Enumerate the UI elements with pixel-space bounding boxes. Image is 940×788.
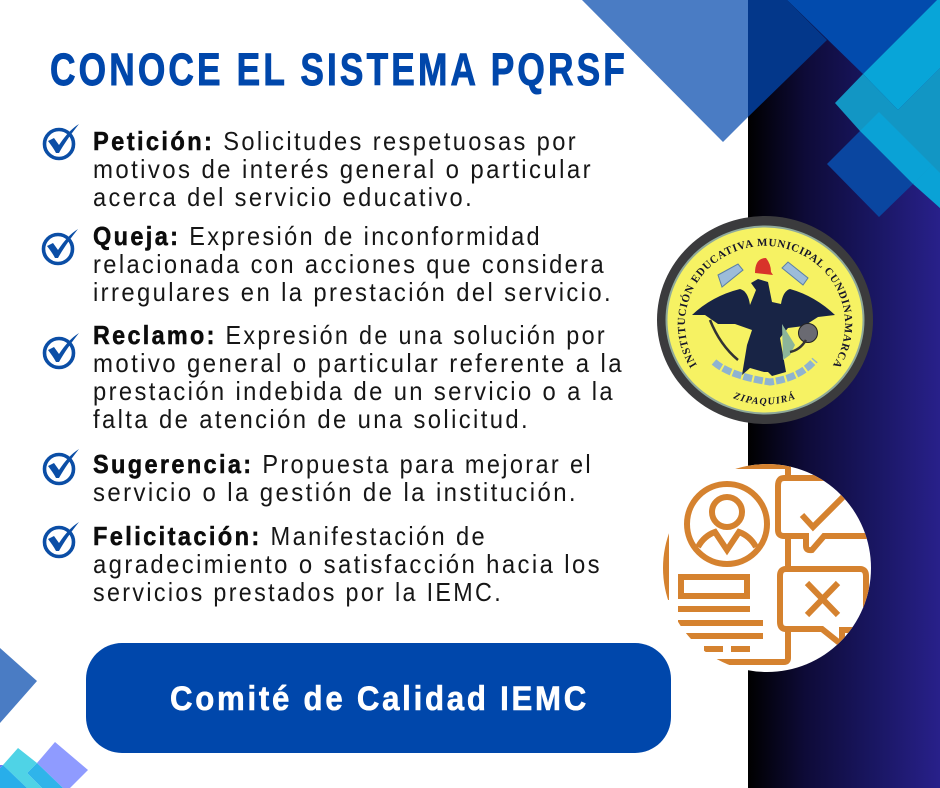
- item: Petición: motivos de interés general o particular: [93, 154, 593, 184]
- item: Reclamo: falta de atención de una solicitud.: [93, 404, 530, 434]
- item: Reclamo: motivo general o particular referente a la: [93, 348, 624, 378]
- item: Queja: relacionada con acciones que considera: [93, 249, 606, 279]
- school crest seal: [657, 216, 873, 424]
- item: Reclamo: [44, 320, 624, 434]
- right dark gradient panel: [748, 0, 940, 788]
- item: Felicitación: servicios prestados por la IEMC.: [93, 577, 503, 607]
- item: Sugerencia: Sugerencia: Propuesta para mejorar el: [93, 449, 593, 479]
- item: Petición: Petición: Solicitudes respetuosas por: [93, 126, 578, 156]
- item: Sugerencia: [44, 449, 593, 507]
- school crest seal: ZIPAQUIRÁ: [733, 390, 795, 406]
- item: Petición: [44, 124, 593, 212]
- item: Felicitación: [44, 521, 602, 607]
- item: Sugerencia: servicio o la gestión de la institución.: [93, 477, 578, 507]
- school crest seal: INSTITUCIÓN EDUCATIVA MUNICIPAL CUNDINAMARCA: [678, 238, 852, 368]
- item: Petición: acerca del servicio educativo.: [93, 182, 474, 212]
- item: Queja: Queja: Expresión de inconformidad: [93, 221, 542, 251]
- bottom-left decorative shapes: [0, 648, 88, 788]
- button: Comité de Calidad IEMC: Comité de Calidad IEMC: [170, 680, 589, 718]
- item: Reclamo: Reclamo: Expresión de una solución por: [93, 320, 607, 350]
- feedback icon circle: [663, 464, 871, 672]
- top decorative triangles and diamonds: [582, 0, 940, 217]
- button: Comité de Calidad IEMC: [86, 643, 671, 753]
- item: Felicitación: Felicitación: Manifestación de: [93, 521, 487, 551]
- item: Reclamo: prestación indebida de un servicio o a la: [93, 376, 615, 406]
- item: Queja: irregulares en la prestación del servicio.: [93, 277, 613, 307]
- item: Queja: [44, 221, 613, 307]
- title: CONOCE EL SISTEMA PQRSF: [50, 44, 628, 95]
- item: Felicitación: agradecimiento o satisfacción hacia los: [93, 549, 602, 579]
